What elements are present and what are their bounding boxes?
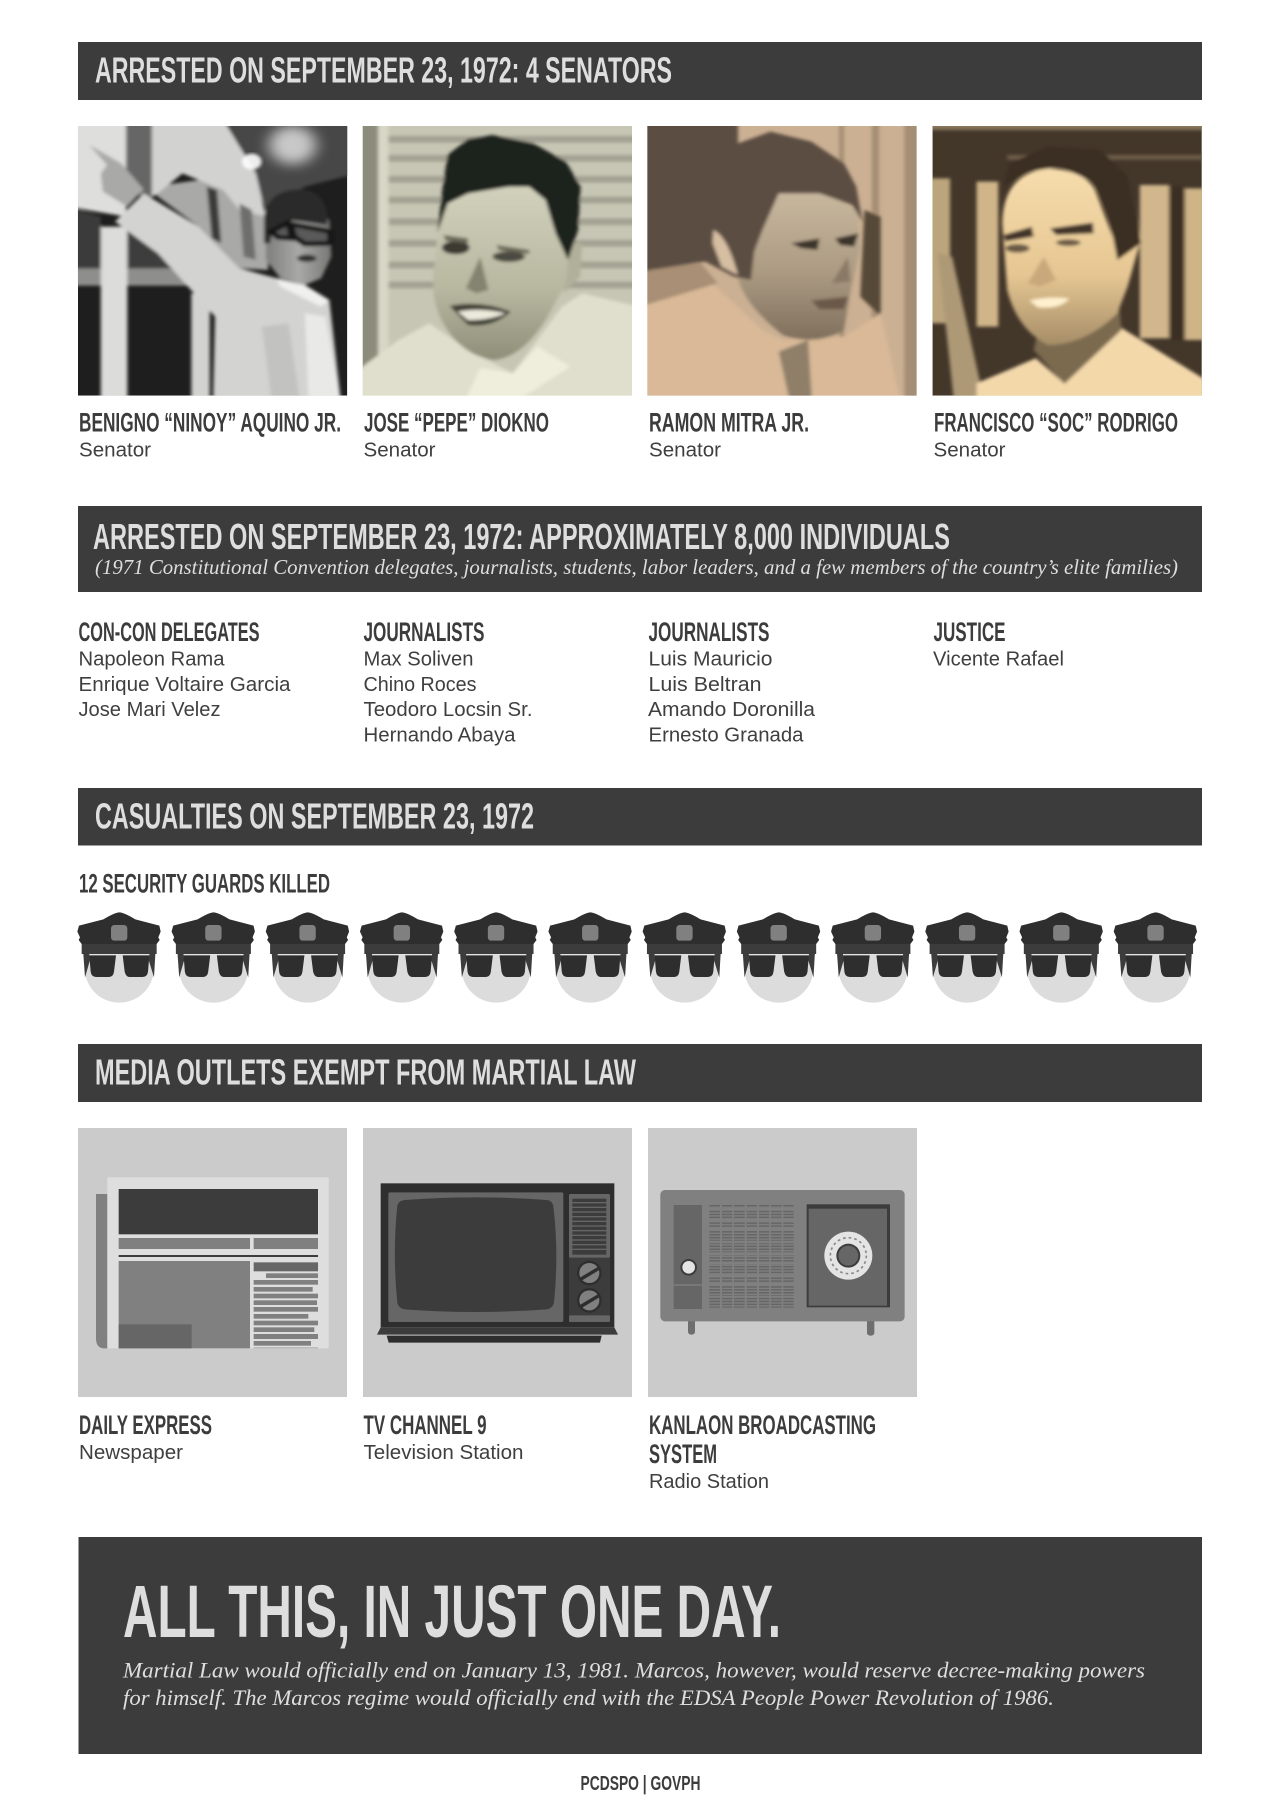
list: journalists two: JOURNALISTS <box>648 617 770 647</box>
label: Francisco Rodrigo: Senator <box>934 440 1006 462</box>
list: journalists one: Teodoro Locsin Sr. <box>364 699 532 721</box>
banner: 4 senators: ARRESTED ON SEPTEMBER 23, 1972: 4 SENATORS <box>95 50 672 90</box>
label: Kanlaon Broadcasting System: KANLAON BROADCASTING <box>649 1410 876 1440</box>
list: con-con delegates: CON-CON DELEGATES <box>78 617 260 647</box>
label: Kanlaon Broadcasting System <box>649 1410 876 1493</box>
label: Daily Express <box>79 1410 212 1464</box>
icon row: 12 guards <box>77 912 1197 1003</box>
label: Kanlaon Broadcasting System: SYSTEM <box>649 1439 717 1469</box>
label: TV Channel 9: Television Station <box>364 1442 524 1464</box>
icon panel: newspaper <box>78 1128 347 1397</box>
photo: Ramon Mitra <box>647 126 917 396</box>
label: Kanlaon Broadcasting System: Radio Station <box>649 1471 769 1493</box>
label: TV Channel 9 <box>364 1410 524 1464</box>
list: journalists one: Chino Roces <box>364 674 476 696</box>
banner: 8,000 individuals <box>78 506 1202 592</box>
label: Benigno Aquino: Senator <box>79 440 151 462</box>
list: con-con delegates <box>78 617 291 721</box>
label: Francisco Rodrigo <box>934 408 1178 462</box>
label: Daily Express: DAILY EXPRESS <box>79 1410 212 1440</box>
banner: casualties <box>78 788 1202 846</box>
list: journalists two: Luis Mauricio <box>648 649 772 671</box>
label: Ramon Mitra: Senator <box>649 440 721 462</box>
closing panel: Martial Law would officially end on January 13, 1981. Marcos, however, would reserve decree-making powers <box>122 1658 1145 1682</box>
list: justice: JUSTICE <box>934 617 1006 647</box>
banner: media outlets: MEDIA OUTLETS EXEMPT FROM MARTIAL LAW <box>95 1052 636 1092</box>
label: Ramon Mitra <box>649 408 809 462</box>
photo: Benigno Aquino <box>78 126 348 396</box>
banner: media outlets <box>78 1044 1202 1102</box>
list: journalists one <box>364 617 532 747</box>
banner: 8,000 individuals: (1971 Constitutional Convention delegates, journalists, students, labor leaders, and a few members of the country’s elite families) <box>95 555 1178 579</box>
list: con-con delegates: Napoleon Rama <box>78 649 225 671</box>
label: Ramon Mitra: RAMON MITRA JR. <box>649 408 809 438</box>
list: journalists one: Max Soliven <box>364 649 474 671</box>
photo: Francisco Rodrigo <box>932 126 1202 396</box>
closing panel: ALL THIS, IN JUST ONE DAY. <box>123 1570 781 1653</box>
label: Benigno Aquino: BENIGNO “NINOY” AQUINO JR. <box>79 408 341 438</box>
closing panel: for himself. The Marcos regime would officially end with the EDSA People Power Revolution of 1986. <box>123 1685 1054 1710</box>
icon panel: television <box>363 1128 632 1397</box>
label: Jose Diokno <box>364 408 549 462</box>
list: justice <box>933 617 1064 671</box>
label: Daily Express: Newspaper <box>79 1442 183 1464</box>
label: Jose Diokno: JOSE “PEPE” DIOKNO <box>364 408 549 438</box>
closing panel <box>78 1537 1202 1754</box>
label: TV Channel 9: TV CHANNEL 9 <box>364 1410 486 1440</box>
list: journalists two: Luis Beltran <box>648 674 762 696</box>
label: Jose Diokno: Senator <box>364 440 436 462</box>
label: Benigno Aquino <box>79 408 341 462</box>
footer credit: PCDSPO | GOVPH <box>580 1773 700 1795</box>
photo: Jose Diokno <box>362 126 632 396</box>
banner: 4 senators <box>78 42 1202 100</box>
subheading: security guards: 12 SECURITY GUARDS KILLED <box>79 869 330 899</box>
list: journalists two <box>648 617 816 747</box>
icon panel: radio <box>648 1128 917 1397</box>
list: journalists two: Amando Doronilla <box>648 699 816 721</box>
list: justice: Vicente Rafael <box>933 649 1064 671</box>
list: journalists two: Ernesto Granada <box>648 725 804 747</box>
list: journalists one: Hernando Abaya <box>364 725 516 747</box>
list: con-con delegates: Jose Mari Velez <box>78 699 220 721</box>
banner: casualties: CASUALTIES ON SEPTEMBER 23, 1972 <box>95 796 534 836</box>
list: con-con delegates: Enrique Voltaire Garcia <box>78 674 291 696</box>
list: journalists one: JOURNALISTS <box>364 617 484 647</box>
